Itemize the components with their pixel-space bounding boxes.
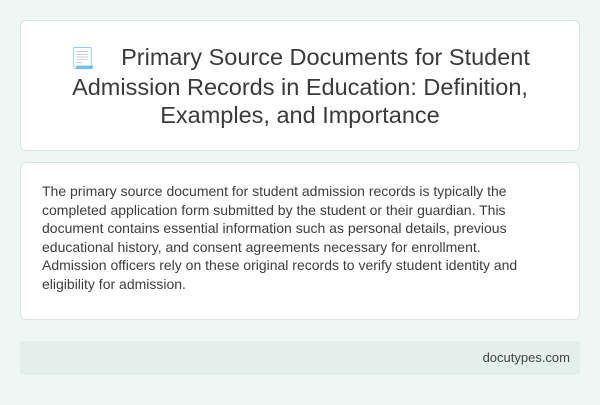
body text: The primary source document for student admission records is typically the completed application form submitted by the student or their guardian. This document contains essential information such as personal details, previous educational history, and consent agreements necessary for enrollment. Admission officers rely on these original records to verify student identity and eligibility for admission. xyxy=(42,183,517,292)
footer xyxy=(20,341,580,375)
title card xyxy=(20,20,580,151)
title: 📃 Primary Source Documents for Student Admission Records in Education: Definition, Examples, and Importance xyxy=(70,44,530,128)
footer: docutypes.com xyxy=(483,350,570,365)
body card xyxy=(20,162,580,320)
